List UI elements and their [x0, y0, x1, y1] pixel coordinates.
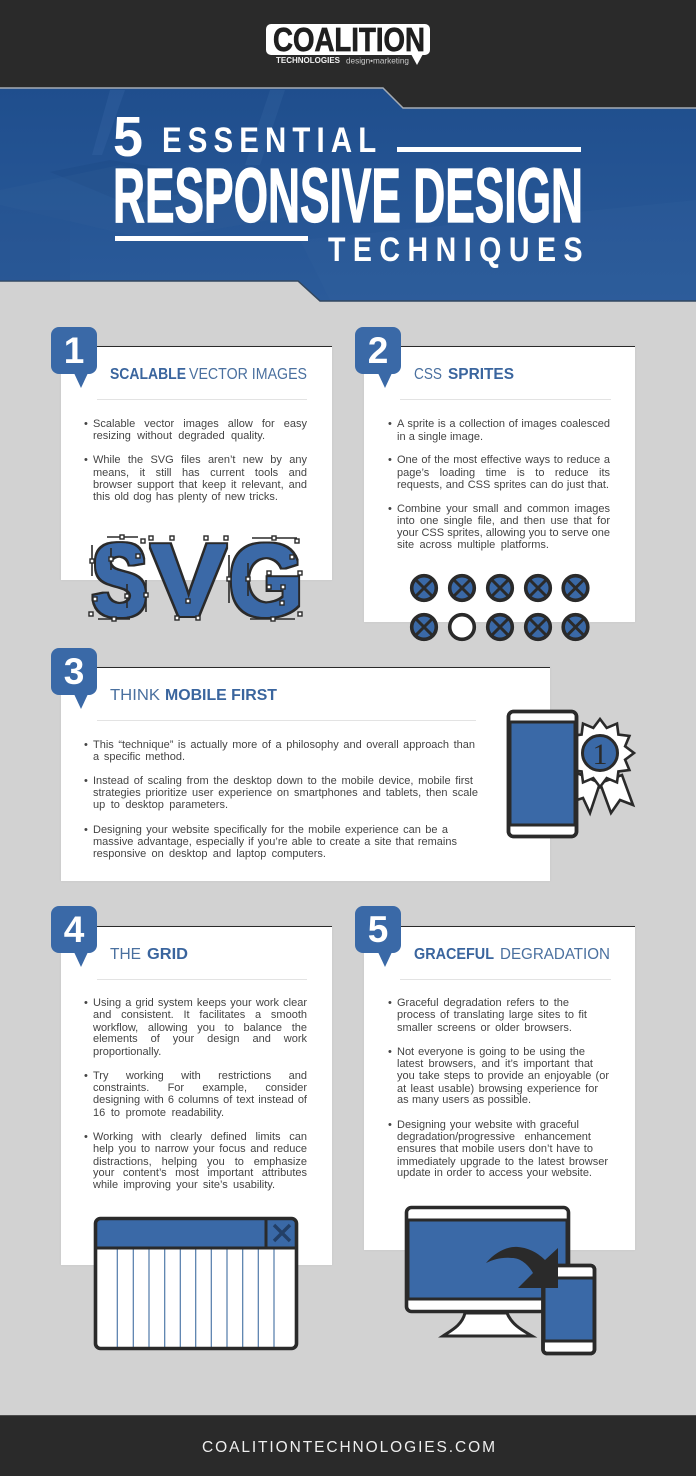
banner background: [0, 0, 696, 302]
text block: mobile first bullets: This “technique” is actually more of a philosophy and overall approach than: [93, 739, 475, 751]
panel: think mobile first: •: [84, 775, 88, 787]
heading: scalable vector images: VECTOR IMAGES: [189, 366, 307, 383]
panel: css sprites: •: [388, 454, 392, 466]
text block: sprites bullets: requests, and CSS sprites can do just that.: [397, 479, 609, 491]
text block: mobile first bullets: up to desktop parameters.: [93, 799, 228, 811]
text block: grid bullets: workflow, allowing you to balance the: [93, 1022, 307, 1034]
panel: the grid: [51, 906, 332, 1265]
panel: scalable vector images: •: [84, 454, 88, 466]
text block: svg bullets: this old dog has plenty of new tricks.: [93, 491, 278, 503]
marker: number 2: [355, 327, 401, 388]
marker: number 4: 4: [64, 909, 85, 950]
text block: grid bullets: [84, 997, 307, 1191]
text block: sprites bullets: A sprite is a collection of images coalesced: [397, 418, 610, 430]
panel: the grid: •: [84, 1070, 88, 1082]
panel: css sprites: [355, 327, 635, 622]
heading: graceful degradation: [414, 946, 610, 963]
heading: the grid: GRID: [147, 946, 188, 963]
text block: sprites bullets: One of the most effective ways to reduce a: [397, 454, 610, 466]
text block: grid bullets: Using a grid system keeps your work clear: [93, 997, 307, 1009]
text block: grid bullets: distractions, helping you to emphasize: [93, 1156, 307, 1168]
text block: grid bullets: your content’s most important attributes: [93, 1167, 307, 1179]
panel: css sprites: •: [388, 418, 392, 430]
text block: grid bullets: while improving your site’s usability.: [93, 1179, 275, 1191]
text block: grid bullets: proportionally.: [93, 1046, 161, 1058]
text block: degradation bullets: as many users as possible.: [397, 1094, 531, 1106]
heading: the grid: [110, 946, 188, 963]
text block: degradation bullets: smaller screens or older browsers.: [397, 1022, 572, 1034]
text block: grid bullets: designing with 6 columns of text instead of: [93, 1094, 307, 1106]
text block: degradation bullets: degradation/progressive enhancement: [397, 1131, 591, 1143]
text block: sprites bullets: Combine your small and common images: [397, 503, 610, 515]
heading: think mobile first: MOBILE FIRST: [165, 687, 277, 704]
text block: svg bullets: means, it still has current tools and: [93, 467, 307, 479]
text block: degradation bullets: [388, 997, 609, 1179]
text block: mobile first bullets: Instead of scaling from the desktop down to the mobile device, mobile first: [93, 775, 473, 787]
text block: degradation bullets: Graceful degradation refers to the: [397, 997, 569, 1009]
text block: svg bullets: resizing without degraded quality.: [93, 430, 265, 442]
title: [113, 105, 583, 269]
text block: svg bullets: [84, 418, 307, 503]
icon: grid window: [94, 1216, 298, 1350]
text block: mobile first bullets: a specific method.: [93, 751, 185, 763]
text block: grid bullets: elements of your design and work: [93, 1033, 307, 1045]
text block: grid bullets: 16 to promote readability.: [93, 1107, 224, 1119]
heading: think mobile first: THINK: [110, 687, 160, 704]
text block: svg bullets: While the SVG files aren’t new by any: [93, 454, 307, 466]
marker: number 5: 5: [368, 909, 388, 950]
panel: the grid: •: [84, 997, 88, 1009]
panel: scalable vector images: •: [84, 418, 88, 430]
heading: think mobile first: [110, 687, 277, 704]
panel: the grid: •: [84, 1131, 88, 1143]
marker: number 5: [355, 906, 401, 967]
panel: think mobile first: [51, 648, 550, 881]
text block: grid bullets: help you to narrow your focus and reduce: [93, 1143, 307, 1155]
text block: grid bullets: Try working with restrictions and: [93, 1070, 307, 1082]
title: TECHNIQUES: [328, 231, 583, 269]
panel: graceful degradation: •: [388, 1046, 392, 1058]
icon: sprite circles grid: [410, 574, 590, 642]
header logo: design•marketing: [346, 56, 409, 66]
panel: think mobile first: •: [84, 739, 88, 751]
icon: smartphone with award ribbon: 1: [592, 738, 608, 771]
heading: scalable vector images: SCALABLE: [110, 366, 186, 383]
text block: mobile first bullets: responsive on desktop and laptop computers.: [93, 848, 326, 860]
header logo: TECHNOLOGIES: [276, 55, 340, 65]
text block: grid bullets: and consistent. It facilitates a smooth: [93, 1009, 307, 1021]
text block: mobile first bullets: massive advantage, especially if you’re able to create a site that remains: [93, 836, 457, 848]
title: 5: [113, 105, 143, 169]
panel: graceful degradation: [355, 906, 635, 1250]
heading: css sprites: SPRITES: [448, 366, 514, 383]
heading: scalable vector images: [110, 366, 307, 383]
heading: css sprites: CSS: [414, 366, 442, 383]
panel: css sprites: •: [388, 503, 392, 515]
text block: sprites bullets: your CSS sprites, allowing you to serve one: [397, 527, 610, 539]
panel: graceful degradation: •: [388, 1119, 392, 1131]
text block: sprites bullets: page’s loading time is to reduce its: [397, 467, 610, 479]
text block: mobile first bullets: strategies prioritize user experience on smartphones and tablets, then scale: [93, 787, 478, 799]
text block: mobile first bullets: [84, 739, 478, 860]
marker: number 4: [51, 906, 97, 967]
text block: sprites bullets: [388, 418, 610, 551]
heading: graceful degradation: GRACEFUL: [414, 946, 494, 963]
text block: sprites bullets: in a single image.: [397, 431, 483, 443]
heading: the grid: THE: [110, 946, 141, 963]
marker: number 3: 3: [64, 651, 84, 692]
text block: svg bullets: browser support that keep it relevant, and: [93, 479, 307, 491]
icon: smartphone with award ribbon: [506, 710, 636, 838]
text block: grid bullets: Working with clearly defined limits can: [93, 1131, 307, 1143]
marker: number 2: 2: [368, 330, 388, 371]
marker: number 3: [51, 648, 97, 709]
footer bar: [0, 1415, 696, 1476]
text block: grid bullets: constraints. For example, consider: [93, 1082, 307, 1094]
text block: degradation bullets: process of translating large sites to fit: [397, 1009, 587, 1021]
marker: number 1: 1: [64, 330, 84, 371]
text block: degradation bullets: you take steps to provide an enjoyable (or: [397, 1070, 609, 1082]
text block: degradation bullets: latest browsers, and it’s important that: [397, 1058, 593, 1070]
text block: degradation bullets: Not everyone is going to be using the: [397, 1046, 585, 1058]
panel: graceful degradation: •: [388, 997, 392, 1009]
text block: degradation bullets: ensures that mobile users don’t have to: [397, 1143, 593, 1155]
text block: degradation bullets: at least usable) browsing experience for: [397, 1083, 598, 1095]
heading: css sprites: [414, 366, 514, 383]
text block: degradation bullets: Designing your website with graceful: [397, 1119, 579, 1131]
marker: number 1: [51, 327, 97, 388]
text block: svg bullets: Scalable vector images allow for easy: [93, 418, 307, 430]
icon: svg letters with vector handles: [88, 530, 303, 626]
panel: scalable vector images: [51, 327, 332, 580]
text block: sprites bullets: into one single file, and then use that for: [397, 515, 610, 527]
text block: degradation bullets: update in order to access your website.: [397, 1167, 592, 1179]
text block: degradation bullets: immediately upgrade to the latest browser: [397, 1156, 608, 1168]
text block: sprites bullets: site across multiple platforms.: [397, 539, 549, 551]
panel: think mobile first: •: [84, 824, 88, 836]
title: ESSENTIAL: [162, 121, 376, 160]
text block: mobile first bullets: Designing your website specifically for the mobile experience can be a: [93, 824, 448, 836]
footer url: COALITIONTECHNOLOGIES.COM: [202, 1439, 495, 1456]
icon: monitor to phone with arrow: [404, 1206, 596, 1356]
heading: graceful degradation: DEGRADATION: [500, 946, 610, 963]
